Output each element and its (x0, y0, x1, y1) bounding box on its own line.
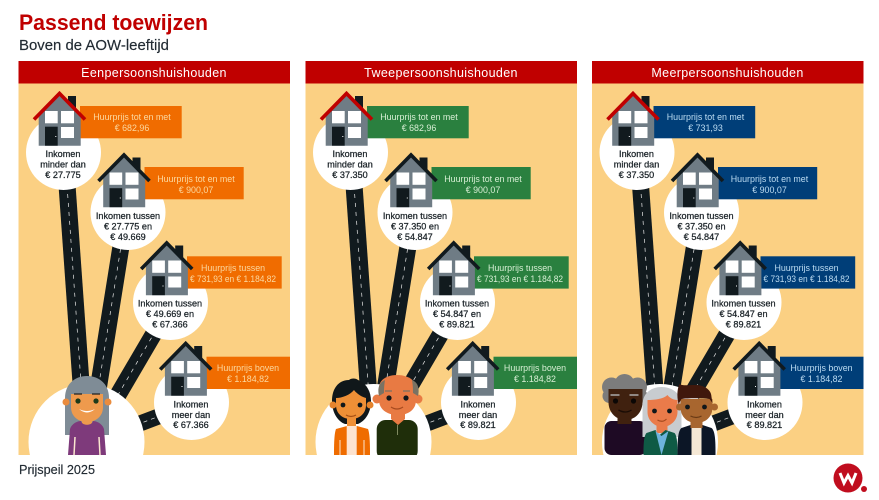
income 3 with rent label: € 54.847 en (719, 309, 768, 319)
panel header (592, 61, 864, 84)
income 4 with rent label (728, 344, 864, 440)
title: Passend toewijzen (19, 10, 208, 35)
income 2 with rent label (378, 155, 531, 250)
income 4 with rent label: € 67.366 (173, 420, 209, 430)
income 4 with rent label (154, 344, 290, 440)
income 1 with rent label: minder dan (327, 160, 373, 170)
income 3 with rent label: Huurprijs tussen (201, 263, 265, 273)
income 1 with rent label: Inkomen (333, 149, 367, 159)
panel background (306, 84, 577, 455)
income 3 with rent label: Huurprijs tussen (774, 263, 839, 273)
income 2 with rent label: € 54.847 (397, 232, 433, 242)
income 4 with rent label: meer dan (172, 410, 210, 420)
panel header: Meerpersoonshuishouden (651, 66, 804, 80)
income 4 with rent label: € 89.821 (747, 420, 782, 430)
panel header: Tweepersoonshuishouden (364, 66, 518, 80)
income 3 with rent label: € 89.821 (439, 320, 475, 330)
income 1 with rent label: Inkomen (46, 149, 80, 159)
income 4 with rent label: Huurprijs boven (790, 363, 853, 373)
panel: Meerpersoonshuishouden (592, 61, 864, 455)
income 4 with rent label: Inkomen (174, 400, 208, 410)
income 1 with rent label (26, 94, 182, 190)
income 2 with rent label: € 900,07 (179, 185, 213, 195)
income 4 with rent label: € 1.184,82 (514, 374, 556, 384)
income 2 with rent label: € 49.669 (110, 232, 146, 242)
income 2 with rent label: Huurprijs tot en met (444, 174, 522, 184)
income 3 with rent label: Huurprijs tussen (488, 263, 552, 273)
income 1 with rent label: Huurprijs tot en met (667, 112, 745, 122)
income 1 with rent label: Inkomen (619, 149, 654, 159)
income 1 with rent label: minder dan (614, 160, 659, 170)
income 3 with rent label: Inkomen tussen (711, 298, 776, 308)
income 3 with rent label (133, 243, 282, 340)
income 4 with rent label: Huurprijs boven (217, 363, 279, 373)
income 2 with rent label: Huurprijs tot en met (731, 174, 809, 184)
footnote: Prijspeil 2025 (19, 462, 95, 477)
income 1 with rent label: Huurprijs tot en met (93, 112, 171, 122)
income 4 with rent label: € 1.184,82 (801, 374, 843, 384)
older man (602, 374, 648, 455)
income 3 with rent label: Inkomen tussen (138, 298, 202, 308)
person circle and three people (602, 374, 718, 455)
income 2 with rent label: Inkomen tussen (383, 211, 447, 221)
person circle and woman (28, 376, 144, 455)
income 2 with rent label: Huurprijs tot en met (157, 174, 235, 184)
income 1 with rent label: € 27.775 (45, 170, 81, 180)
income 3 with rent label (706, 243, 855, 340)
income 3 with rent label: Inkomen tussen (425, 298, 489, 308)
income 2 with rent label: € 900,07 (752, 185, 787, 195)
income 3 with rent label: € 49.669 en (146, 309, 194, 319)
income 2 with rent label: Inkomen tussen (669, 211, 734, 221)
income 1 with rent label: minder dan (40, 160, 86, 170)
younger man (676, 384, 718, 455)
income 4 with rent label: meer dan (459, 410, 497, 420)
income 2 with rent label: € 54.847 (684, 232, 719, 242)
income 1 with rent label: Huurprijs tot en met (380, 112, 458, 122)
panel background (592, 84, 864, 455)
roads (640, 185, 738, 425)
logo (834, 464, 867, 492)
subtitle: Boven de AOW-leeftijd (19, 38, 169, 54)
income 4 with rent label: € 89.821 (460, 420, 496, 430)
panel header (306, 61, 577, 84)
roads (67, 185, 165, 425)
income 1 with rent label: € 37.350 (332, 170, 368, 180)
panel: Tweepersoonshuishouden (306, 61, 577, 455)
income 2 with rent label: € 37.350 en (391, 222, 439, 232)
income 4 with rent label: meer dan (745, 410, 784, 420)
income 4 with rent label: Huurprijs boven (504, 363, 566, 373)
income 2 with rent label: € 900,07 (466, 185, 500, 195)
income 2 with rent label: € 37.350 en (677, 222, 726, 232)
income 3 with rent label (420, 243, 569, 340)
income 4 with rent label (441, 344, 577, 440)
income 1 with rent label: € 682,96 (115, 123, 149, 133)
panel header: Eenpersoonshuishouden (81, 66, 227, 80)
income 3 with rent label: € 89.821 (726, 320, 761, 330)
income 4 with rent label: Inkomen (461, 400, 495, 410)
income 3 with rent label: € 67.366 (152, 320, 188, 330)
income 1 with rent label: € 731,93 (688, 123, 723, 133)
panel background (18, 84, 290, 455)
man (372, 375, 422, 460)
income 1 with rent label (313, 94, 469, 190)
woman (330, 378, 374, 455)
income 1 with rent label (600, 94, 755, 190)
income 2 with rent label: € 27.775 en (104, 222, 152, 232)
income 2 with rent label (664, 155, 817, 250)
roads (354, 185, 452, 425)
income 2 with rent label: Inkomen tussen (96, 211, 160, 221)
income 1 with rent label: € 37.350 (619, 170, 654, 180)
older woman (642, 387, 682, 455)
income 2 with rent label (90, 155, 244, 250)
income 3 with rent label: € 731,93 en € 1.184,82 (764, 274, 850, 284)
income 4 with rent label: € 1.184,82 (227, 374, 269, 384)
income 3 with rent label: € 731,93 en € 1.184,82 (477, 274, 563, 284)
income 3 with rent label: € 731,93 en € 1.184,82 (190, 274, 276, 284)
income 1 with rent label: € 682,96 (402, 123, 436, 133)
person circle and couple (316, 375, 432, 455)
panel: Eenpersoonshuishouden (18, 61, 290, 455)
income 3 with rent label: € 54.847 en (433, 309, 481, 319)
panel header (18, 61, 290, 84)
income 4 with rent label: Inkomen (747, 400, 782, 410)
